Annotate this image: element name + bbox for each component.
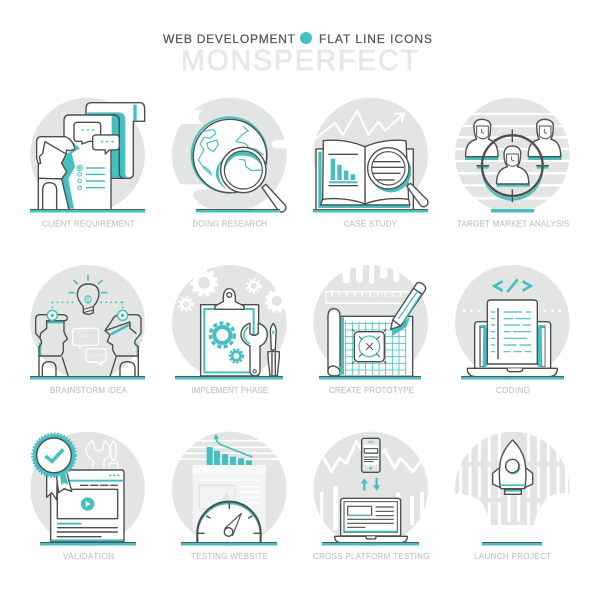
- icon: rocket: [493, 440, 533, 494]
- icon: browser window: [51, 470, 124, 541]
- icon: pencil: [391, 282, 426, 336]
- label: DOING RESEARCH: [192, 220, 267, 228]
- icon: target ring: [477, 130, 548, 202]
- icon: code document: [487, 300, 537, 364]
- icon: globe: [192, 117, 267, 194]
- icon: white background gears: [179, 270, 287, 312]
- heading: web development: WEB DEVELOPMENT: [163, 32, 296, 46]
- icon: dotted links: [52, 302, 123, 308]
- icon: chat bubbles: [74, 122, 119, 154]
- icon: gears: [210, 323, 243, 363]
- baseline: [196, 209, 280, 212]
- label: CROSS PLATFORM TESTING: [313, 552, 430, 561]
- label: LAUNCH PROJECT: [474, 552, 551, 561]
- brand name: MONSPERFECT: [181, 45, 418, 77]
- icon: blueprint: [328, 309, 413, 376]
- baseline: [30, 376, 145, 380]
- icon: person centre: [497, 146, 530, 187]
- baseline: [491, 209, 534, 212]
- icon: magnifier: [368, 148, 428, 207]
- icon: ruler: [326, 292, 409, 303]
- label: BRAINSTORM IDEA: [50, 386, 128, 395]
- icon: trend arrow: [316, 111, 404, 138]
- label: CASE STUDY: [344, 220, 398, 228]
- icon: streaked exhaust background: [453, 430, 572, 550]
- icon: smartphone: [362, 438, 380, 472]
- icon: falling bar chart: [207, 434, 252, 465]
- icon: scroll: [64, 103, 145, 210]
- icon: person right: [105, 310, 141, 377]
- icon: wrench: [241, 323, 267, 376]
- panel: create prototype: [313, 263, 428, 395]
- icon: teal dot: [300, 32, 312, 44]
- icon: code brackets: [494, 279, 531, 292]
- heading: flat line icons: FLAT LINE ICONS: [319, 32, 432, 46]
- panel: coding: [455, 265, 570, 395]
- panel: client requirement: [30, 98, 145, 229]
- baseline: [322, 542, 419, 546]
- icon: person right: [528, 119, 562, 160]
- label: CREATE PROTOTYPE: [329, 386, 414, 395]
- icon: speedometer: [197, 502, 261, 544]
- icon: white chat bubbles: [73, 328, 106, 365]
- icon: faded web page: [193, 465, 266, 532]
- label: IMPLEMENT PHASE: [192, 386, 268, 395]
- baseline: [175, 376, 283, 380]
- baseline: [181, 542, 277, 546]
- icon: award ribbon: [32, 433, 76, 500]
- icon: person: [37, 137, 80, 210]
- label: TESTING WEBSITE: [191, 552, 268, 561]
- panel: cross platform testing: [313, 432, 430, 561]
- title: [163, 32, 432, 77]
- label: VALIDATION: [63, 552, 114, 561]
- icon: screwdriver: [268, 323, 279, 376]
- baseline: [313, 209, 428, 212]
- panel: target market analysis: [453, 98, 572, 229]
- icon: light bulb: [69, 275, 107, 314]
- baseline: [30, 209, 145, 212]
- panel: brainstorm idea: [30, 265, 145, 395]
- icon: open book: [316, 140, 413, 210]
- baseline: [482, 542, 542, 546]
- panel: launch project: [453, 430, 572, 561]
- icon: laptop: [467, 322, 557, 377]
- panel: case study: [313, 98, 428, 229]
- label: CLIENT REQUIREMENT: [42, 220, 135, 228]
- icon: sync arrows: [361, 478, 380, 491]
- panel: testing website: [172, 432, 287, 561]
- icon: laptop: [335, 498, 407, 543]
- baseline: [461, 376, 564, 380]
- label: TARGET MARKET ANALYSIS: [457, 220, 570, 228]
- icon: person left: [465, 119, 498, 160]
- icon: person left: [36, 310, 68, 377]
- label: CODING: [496, 386, 530, 395]
- panel: implement phase: [172, 265, 287, 395]
- baseline: [40, 542, 136, 546]
- icon: clipboard: [201, 289, 259, 376]
- icon: white wrench and screwdriver: [86, 441, 118, 470]
- icon: checklist: [77, 165, 104, 189]
- baseline: [319, 376, 421, 380]
- panel: doing research: [167, 98, 290, 229]
- panel: validation: [30, 432, 145, 561]
- icon: magnifier: [221, 147, 286, 212]
